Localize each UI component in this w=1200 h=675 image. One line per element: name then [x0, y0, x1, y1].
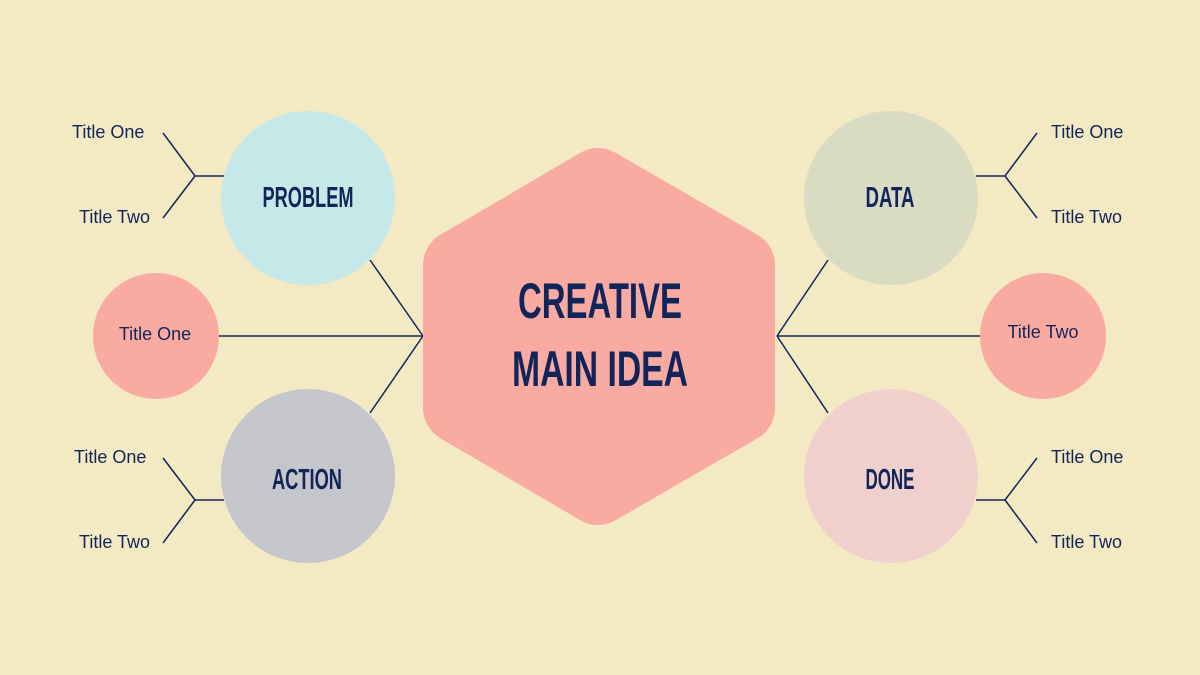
circle: action: [221, 389, 395, 563]
fork: action: [163, 458, 224, 543]
fork: done: [976, 458, 1037, 543]
labels: done: Title One: [1051, 447, 1123, 467]
labels: data: [1051, 122, 1123, 227]
hexagon: main idea: [458, 183, 740, 490]
circle: done: DONE: [866, 464, 914, 496]
connector lines: left: [218, 260, 423, 413]
labels: problem: Title Two: [79, 207, 150, 227]
connector lines: right: [777, 260, 982, 413]
circle: problem: PROBLEM: [262, 182, 354, 214]
fork: problem: [163, 133, 224, 218]
labels: data: Title Two: [1051, 207, 1122, 227]
circle: done: [804, 389, 978, 563]
labels: data: Title One: [1051, 122, 1123, 142]
labels: done: Title Two: [1051, 532, 1122, 552]
small circle right: [980, 273, 1106, 399]
labels: problem: Title One: [72, 122, 144, 142]
small circle left: [93, 273, 219, 399]
fork: data: [976, 133, 1037, 218]
circle: data: [804, 111, 978, 285]
labels: action: [74, 447, 150, 552]
labels: action: Title Two: [79, 532, 150, 552]
labels: action: Title One: [74, 447, 146, 467]
labels: problem: [72, 122, 150, 227]
labels: done: [1051, 447, 1123, 552]
circle: action: ACTION: [272, 464, 342, 496]
small circle left: Title One: [119, 324, 191, 344]
circle: data: DATA: [866, 182, 915, 214]
hexagon: main idea: MAIN IDEA: [512, 341, 688, 397]
circle: problem: [221, 111, 395, 285]
small circle right: Title Two: [1007, 322, 1079, 342]
hexagon: main idea: CREATIVE: [518, 273, 682, 329]
